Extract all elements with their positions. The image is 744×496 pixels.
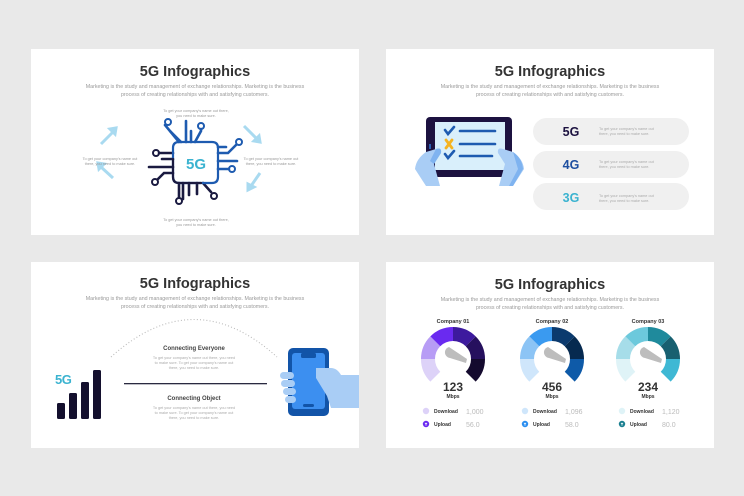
gauge: company 02 bbox=[522, 319, 583, 429]
gauge: company 01: Company 01 bbox=[437, 319, 469, 325]
text: connecting object: there, you need to make sure. bbox=[169, 416, 219, 420]
subtitle: process of creating relationships with and satisfying customers. bbox=[476, 305, 624, 311]
gauge: company 02: 1,096 bbox=[565, 409, 583, 416]
text: connecting everyone: To get your company's name out there, you need bbox=[153, 356, 235, 360]
subtitle: Marketing is the study and management of exchange relationships. Marketing is the business bbox=[441, 297, 660, 303]
subtitle bbox=[86, 296, 305, 310]
title: 5G Infographics bbox=[495, 277, 605, 293]
tablet icon bbox=[415, 117, 524, 186]
text: connecting object: To get your company's name out there, you need bbox=[153, 406, 235, 410]
callout texts: there, you need to make sure. bbox=[246, 162, 296, 166]
pill: 5G: To get your company's name out bbox=[599, 127, 655, 131]
pill: 4G: To get your company's name out bbox=[599, 160, 655, 164]
callout texts: To get your company's name out there, bbox=[163, 109, 229, 113]
gauge: company 02: 456 bbox=[542, 380, 562, 394]
gauge: company 03: Company 03 bbox=[632, 319, 664, 325]
callout texts: there, you need to make sure. bbox=[85, 162, 135, 166]
text: connecting object: Connecting Object bbox=[167, 396, 221, 402]
subtitle: process of creating relationships with and satisfying customers. bbox=[121, 304, 269, 310]
arrows bbox=[98, 126, 260, 190]
dotted arc bbox=[111, 320, 277, 357]
subtitle: Marketing is the study and management of exchange relationships. Marketing is the business bbox=[86, 296, 305, 302]
panel: tablet slide bbox=[386, 49, 714, 235]
gauge: company 02: Upload bbox=[533, 422, 550, 428]
gauge: company 02: Company 02 bbox=[536, 319, 568, 325]
signal icon bbox=[55, 370, 101, 419]
subtitle: Marketing is the study and management of exchange relationships. Marketing is the business bbox=[441, 84, 660, 90]
phone in hand icon bbox=[280, 348, 359, 416]
gauge: company 01: 123 bbox=[443, 380, 463, 394]
title: 5G Infographics bbox=[140, 276, 250, 292]
gauge: company 03 bbox=[619, 319, 680, 429]
pill: 5G: 5G bbox=[563, 125, 579, 139]
subtitle: process of creating relationships with and satisfying customers. bbox=[121, 92, 269, 98]
subtitle bbox=[86, 84, 305, 98]
gauge: company 03: 1,120 bbox=[662, 409, 680, 416]
pill: 3G bbox=[533, 183, 689, 210]
pill: 5G bbox=[533, 118, 689, 145]
gauge: company 01: 1,000 bbox=[466, 409, 484, 416]
pill: 4G: 4G bbox=[563, 158, 579, 172]
callout texts: you need to make sure. bbox=[176, 114, 216, 118]
gauge: company 01: Mbps bbox=[446, 394, 460, 400]
gauge: company 01: Upload bbox=[434, 422, 451, 428]
text: connecting object: to make sure. To get your company's name out bbox=[155, 411, 234, 415]
gauge: company 01: Download bbox=[434, 409, 458, 415]
pill: 3G: there, you need to make sure. bbox=[599, 199, 649, 203]
text: connecting object bbox=[153, 396, 235, 420]
gauge: company 03: 234 bbox=[638, 380, 658, 394]
text: connecting everyone: Connecting Everyone bbox=[163, 346, 225, 352]
gauge: company 01: 56.0 bbox=[466, 422, 480, 429]
panel: speed gauges slide bbox=[386, 262, 714, 448]
pill: 4G bbox=[533, 151, 689, 178]
gauge: company 03: Mbps bbox=[641, 394, 655, 400]
gauge: company 01 bbox=[423, 319, 484, 429]
chip icon bbox=[149, 119, 242, 204]
title: 5G Infographics bbox=[495, 64, 605, 80]
text: connecting everyone bbox=[153, 346, 235, 370]
gauge: company 03: Download bbox=[630, 409, 654, 415]
subtitle: process of creating relationships with and satisfying customers. bbox=[476, 92, 624, 98]
callout texts: you need to make sure. bbox=[176, 223, 216, 227]
gauge: company 02: 58.0 bbox=[565, 422, 579, 429]
pill: 4G: there, you need to make sure. bbox=[599, 165, 649, 169]
signal icon: 5G bbox=[55, 372, 72, 387]
callout texts: To get your company's name out there, bbox=[163, 218, 229, 222]
subtitle bbox=[441, 297, 660, 311]
gauge: company 02: Mbps bbox=[545, 394, 559, 400]
callout texts: To get your company's name out bbox=[83, 157, 138, 161]
pill: 3G: 3G bbox=[563, 191, 579, 205]
chip label: 5G bbox=[186, 156, 206, 173]
text: connecting everyone: there, you need to make sure. bbox=[169, 366, 219, 370]
panel: connecting slide bbox=[31, 262, 359, 448]
text: connecting everyone: to make sure. To get your company's name out bbox=[155, 361, 234, 365]
callout texts: To get your company's name out bbox=[244, 157, 299, 161]
subtitle: Marketing is the study and management of exchange relationships. Marketing is the business bbox=[86, 84, 305, 90]
panel: chip slide bbox=[31, 49, 359, 235]
title: 5G Infographics bbox=[140, 64, 250, 80]
subtitle bbox=[441, 84, 660, 98]
pill: 5G: there, you need to make sure. bbox=[599, 132, 649, 136]
divider line bbox=[124, 383, 267, 384]
gauge: company 02: Download bbox=[533, 409, 557, 415]
callout texts bbox=[83, 109, 299, 227]
pill: 3G: To get your company's name out bbox=[599, 194, 655, 198]
gauge: company 03: 80.0 bbox=[662, 422, 676, 429]
gauge: company 03: Upload bbox=[630, 422, 647, 428]
